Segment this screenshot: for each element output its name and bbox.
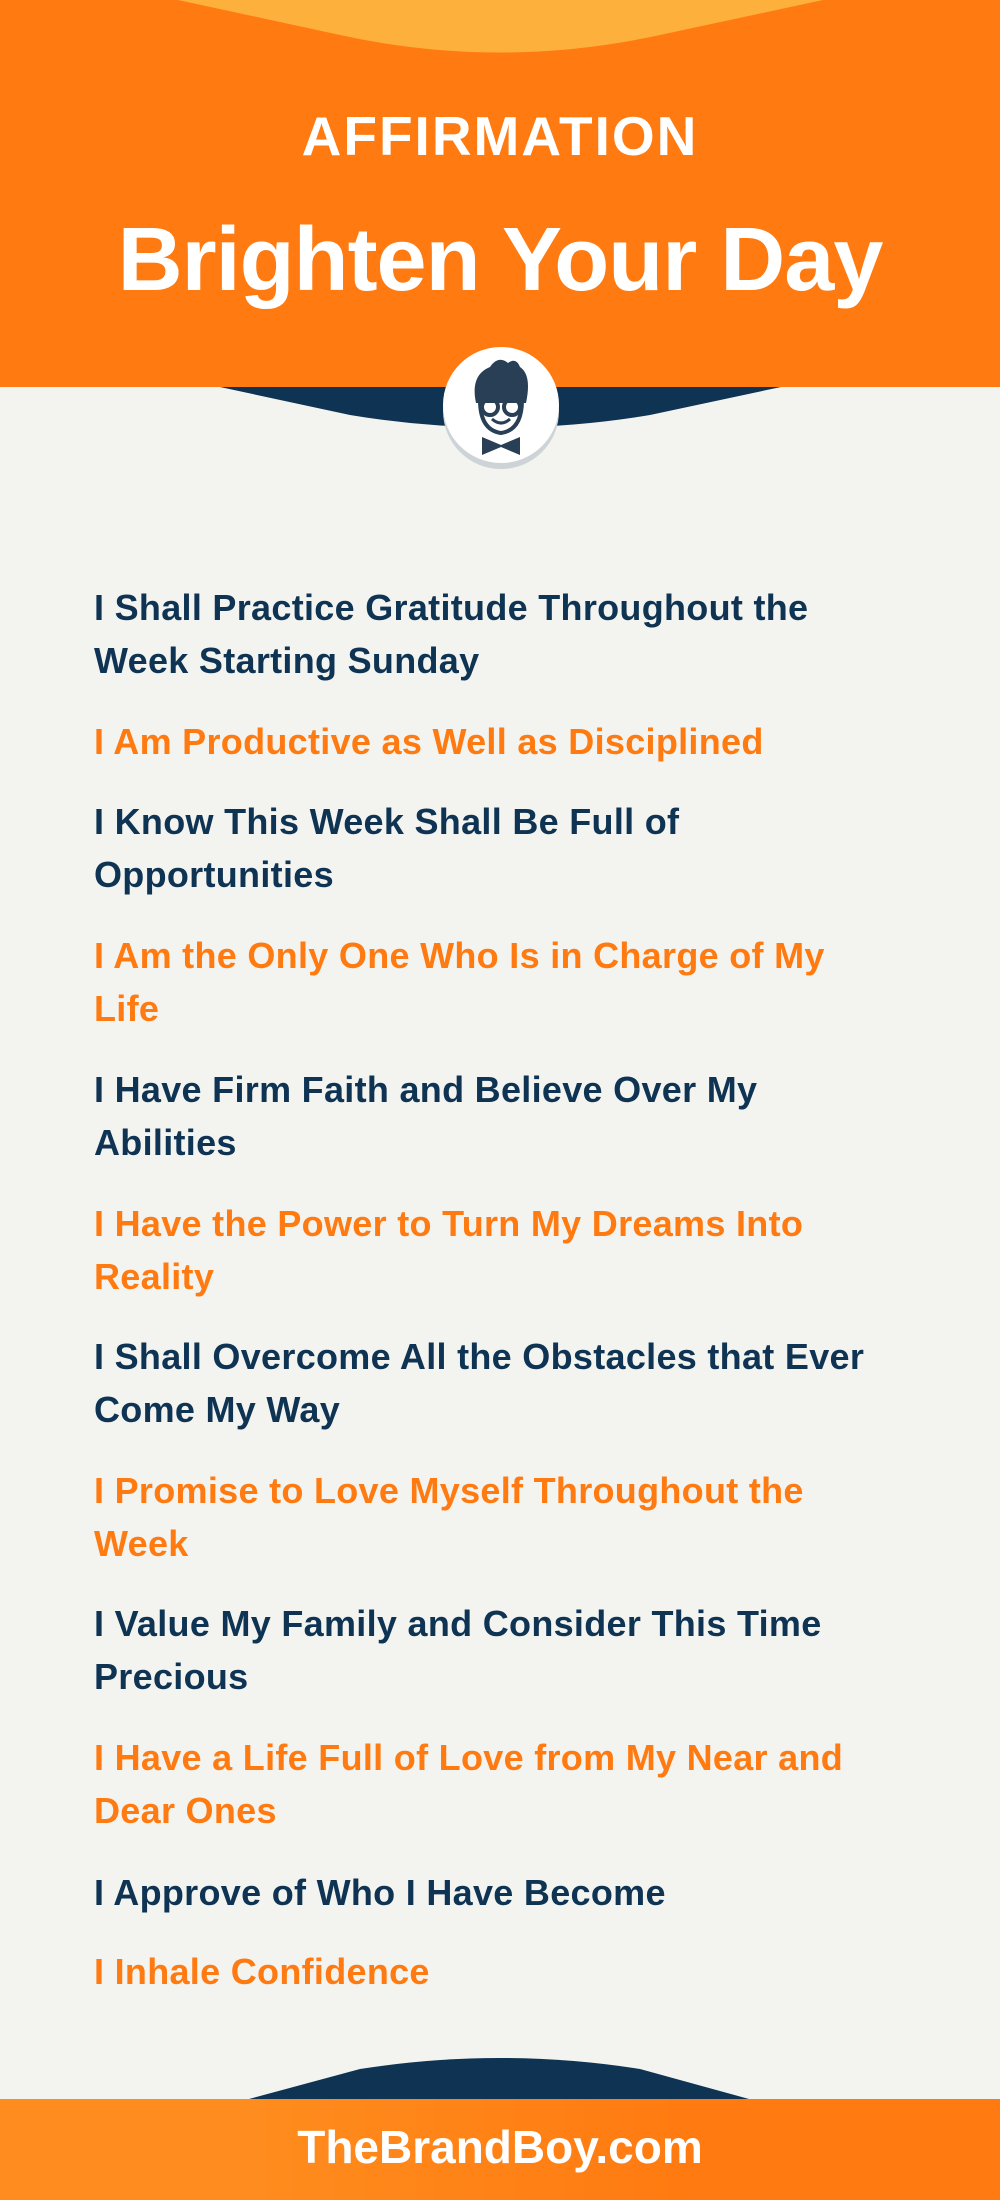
header background with waves [0,0,1000,426]
item 4 [94,935,825,1029]
item 11: I Approve of Who I Have Become [94,1872,666,1913]
title: Brighten Your Day [118,210,882,310]
item 3: I Know This Week Shall Be Full of [94,801,679,842]
icon: brand boy logo [443,347,559,469]
item 8 [94,1470,804,1564]
footer text: TheBrandBoy.com [297,2121,703,2173]
item 2: I Am Productive as Well as Disciplined [94,721,764,762]
item 3: Opportunities [94,854,334,895]
item 4: I Am the Only One Who Is in Charge of My [94,935,825,976]
item 1: Week Starting Sunday [94,640,479,681]
item 6: Reality [94,1256,214,1297]
item 6 [94,1203,803,1297]
item 3 [94,801,680,895]
item 7 [94,1336,864,1430]
item 1 [94,587,808,681]
item 8: Week [94,1523,189,1564]
item 10: Dear Ones [94,1790,277,1831]
item 9 [94,1603,822,1697]
item 5: I Have Firm Faith and Believe Over My [94,1069,757,1110]
item 6: I Have the Power to Turn My Dreams Into [94,1203,803,1244]
item 7: I Shall Overcome All the Obstacles that Ever [94,1336,864,1377]
item 4: Life [94,988,159,1029]
item 10 [94,1737,843,1831]
item 12: I Inhale Confidence [94,1951,430,1992]
header label: AFFIRMATION [302,105,698,167]
item 7: Come My Way [94,1389,340,1430]
item 8: I Promise to Love Myself Throughout the [94,1470,804,1511]
affirmation list [94,587,864,1992]
item 5 [94,1069,757,1163]
footer wave and bar [0,2058,1000,2200]
item 1: I Shall Practice Gratitude Throughout the [94,587,808,628]
item 5: Abilities [94,1122,237,1163]
item 9: I Value My Family and Consider This Time [94,1603,822,1644]
item 9: Precious [94,1656,248,1697]
item 10: I Have a Life Full of Love from My Near and [94,1737,843,1778]
